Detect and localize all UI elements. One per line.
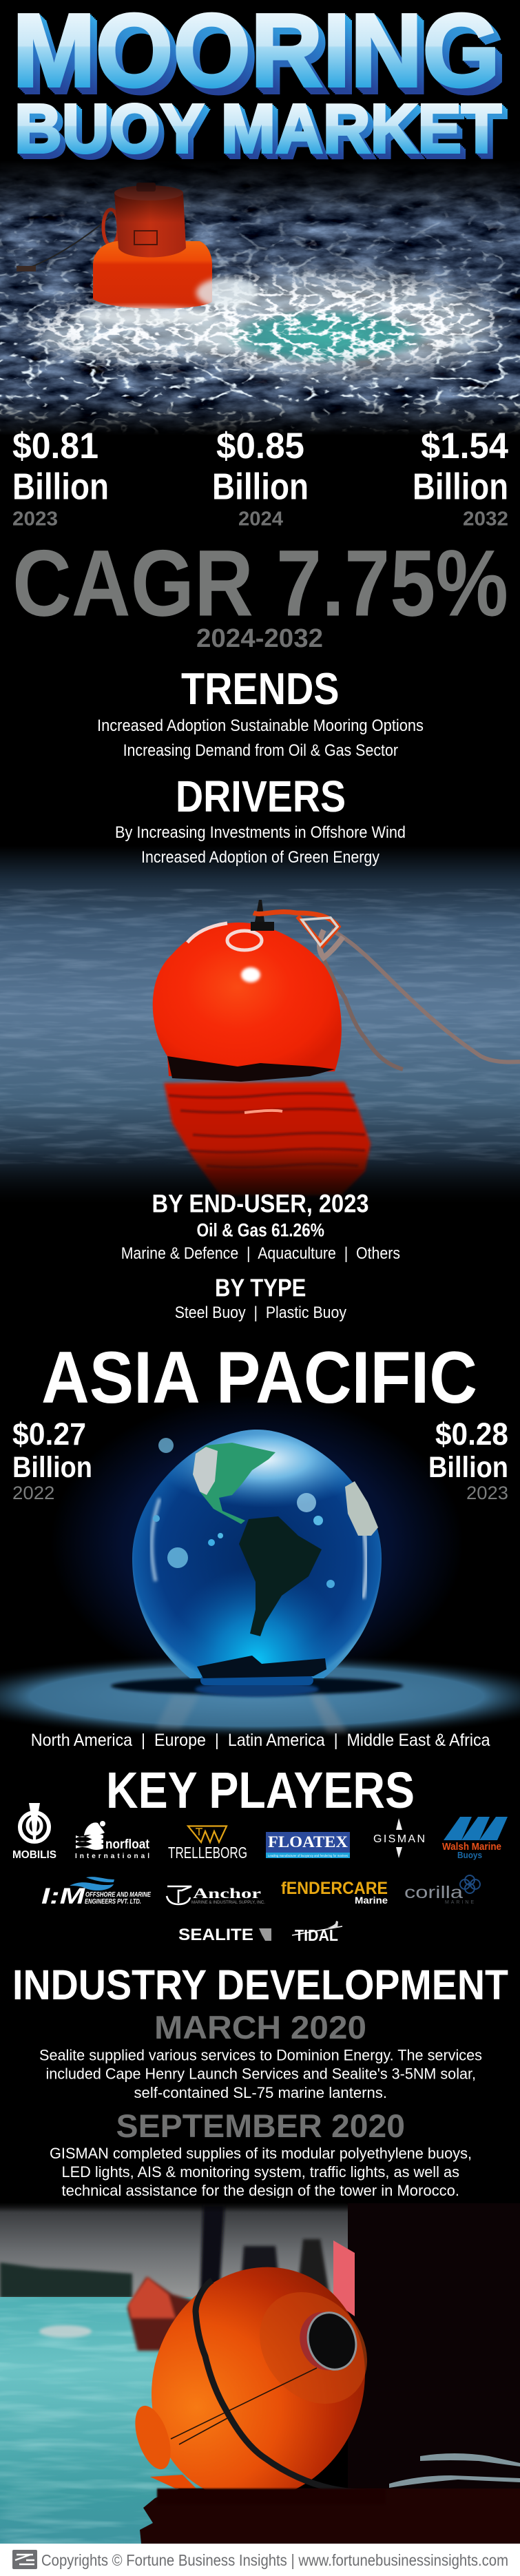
regional stat: 2022: $0.27	[12, 1416, 86, 1452]
logo: IRM Offshore: I:M	[41, 1884, 86, 1908]
asia pacific heading: ASIA PACIFIC	[41, 1336, 477, 1419]
development: March 2020	[39, 2009, 482, 2101]
trends: TRENDS	[181, 663, 339, 714]
market size stats: 2032	[463, 508, 508, 530]
logo: Gisman	[373, 1818, 425, 1858]
logo: Fendercare: fENDERCARE	[281, 1879, 388, 1898]
distant boat	[127, 2277, 196, 2351]
globe sphere	[132, 1430, 382, 1685]
trends: Increasing Demand from Oil & Gas Sector	[123, 741, 398, 760]
drivers	[115, 772, 406, 867]
development: March 2020: MARCH 2020	[154, 2009, 366, 2046]
buoy ball	[117, 2235, 399, 2533]
development: March 2020: included Cape Henry Launch Services and Sealite's 3-5NM solar,	[45, 2065, 476, 2082]
by end-user: BY END-USER, 2023	[152, 1189, 369, 1218]
mooring line	[21, 214, 114, 271]
market size stats	[12, 426, 508, 530]
ropes	[331, 930, 520, 1062]
logo: IRM Offshore: OFFSHORE AND MARINE	[85, 1891, 151, 1899]
logo: Norfloat	[75, 1821, 150, 1860]
logo: Mobilis	[12, 1803, 56, 1861]
logo: Tidal: TIDAL	[295, 1926, 338, 1944]
north america	[193, 1443, 275, 1524]
logo: Corilla: MARINE	[445, 1900, 474, 1905]
buoy fitting	[292, 2305, 358, 2377]
market size stats: $0.85	[216, 426, 304, 466]
development: September 2020: LED lights, AIS & monitoring system, traffic lights, as well as	[62, 2163, 459, 2181]
bubbles	[158, 1438, 174, 1453]
logo: IRM Offshore	[41, 1877, 151, 1908]
dark hull	[341, 2201, 520, 2544]
logo: Gisman: GISMAN	[373, 1833, 425, 1845]
logo: Corilla: corilla	[404, 1883, 463, 1902]
market size stats: $1.54	[421, 426, 508, 466]
logo: Trelleborg: TRELLEBORG	[168, 1844, 247, 1862]
reflection	[0, 1082, 520, 1206]
market size stats: $0.81	[12, 426, 98, 466]
buoy body	[93, 183, 212, 309]
development: September 2020: GISMAN completed supplies of its modular polyethylene buoys,	[50, 2145, 472, 2162]
by type: BY TYPE	[215, 1273, 306, 1302]
water surface below buoy	[157, 2489, 386, 2504]
development: March 2020: Sealite supplied various services to Dominion Energy. The services	[39, 2046, 482, 2064]
key players heading: KEY PLAYERS	[106, 1762, 415, 1819]
logo: Walsh Marine Buoys: Walsh Marine	[442, 1842, 501, 1853]
drivers: DRIVERS	[176, 772, 346, 821]
drivers: By Increasing Investments in Offshore Wind	[115, 823, 406, 842]
logo: Norfloat: International	[75, 1853, 149, 1860]
regional stat: 2023: 2023	[466, 1483, 508, 1503]
by type: Steel Buoy | Plastic Buoy	[175, 1304, 347, 1322]
market size stats: Billion	[12, 466, 109, 507]
logo: Fendercare: Marine	[355, 1895, 388, 1906]
by end-user: Oil & Gas 61.26%	[197, 1219, 324, 1240]
regional stat: 2022: 2022	[12, 1483, 54, 1503]
development: September 2020	[50, 2108, 472, 2199]
buoy rope	[196, 2280, 382, 2493]
title	[12, 0, 501, 167]
logo: Fendercare	[281, 1879, 388, 1906]
title: BUOY MARKET	[14, 90, 501, 167]
logo: IRM Offshore: ENGINEERS PVT. LTD.	[85, 1898, 141, 1906]
logo: Sealite: SEALITE	[178, 1926, 253, 1944]
photo: red mooring buoy on calm water	[0, 846, 520, 1206]
market size stats: 2024	[238, 508, 283, 530]
photo: orange buoy beside vessel	[0, 2198, 520, 2544]
footer	[0, 2544, 520, 2576]
regional stat: 2023: $0.28	[435, 1416, 508, 1452]
by type	[175, 1273, 347, 1322]
logo: Floatex	[266, 1832, 350, 1858]
logo: Corilla	[404, 1875, 480, 1905]
market size stats: Billion	[212, 466, 309, 507]
development: September 2020: SEPTEMBER 2020	[116, 2108, 405, 2144]
logo: Floatex: Leading manufacturer of buoyancy and fendering for marines	[268, 1854, 349, 1857]
CAGR period: 2024-2032	[196, 624, 323, 653]
floor glow	[0, 1653, 520, 1739]
globe illustration	[0, 1395, 520, 1753]
logo: Trelleborg	[168, 1826, 247, 1862]
by end-user	[121, 1189, 400, 1263]
rope knot and handle	[251, 900, 338, 945]
logo: Anchor	[167, 1885, 265, 1905]
regions list: North America | Europe | Latin America | Middle East & Africa	[31, 1731, 490, 1750]
title: BUOY MARKET	[14, 90, 501, 167]
dark water reflection	[140, 2489, 520, 2544]
regional stat: 2023	[428, 1416, 508, 1503]
footer logo	[12, 2550, 37, 2569]
logo: Anchor: MARINE & INDUSTRIAL SUPPLY, INC.	[191, 1901, 265, 1905]
south america	[239, 1516, 322, 1636]
logo: Norfloat: norfloat	[105, 1837, 150, 1852]
regional stat: 2022	[12, 1416, 92, 1503]
bottom land	[197, 1656, 326, 1678]
trends: Increased Adoption Sustainable Mooring Options	[97, 717, 424, 735]
logo: Walsh Marine Buoys: Buoys	[457, 1850, 482, 1860]
logo: Anchor: Anchor	[193, 1885, 261, 1902]
regional stat: 2022: Billion	[12, 1451, 92, 1484]
logo: Walsh Marine Buoys	[442, 1817, 508, 1860]
by end-user: Marine & Defence | Aquaculture | Others	[121, 1244, 400, 1263]
africa edge	[345, 1481, 378, 1536]
buoy ball	[153, 923, 342, 1082]
photo: buoy in rough sea	[0, 161, 520, 444]
masts	[200, 2205, 225, 2301]
drivers: Increased Adoption of Green Energy	[141, 848, 379, 867]
logo: Floatex: FLOATEX	[268, 1833, 348, 1851]
development: September 2020: technical assistance for the design of the tower in Morocco.	[62, 2182, 459, 2199]
logo: Mobilis: MOBILIS	[12, 1849, 56, 1861]
trends	[97, 663, 424, 760]
regional stat: 2023: Billion	[428, 1451, 508, 1484]
development: March 2020: self-contained SL-75 marine lanterns.	[134, 2084, 387, 2101]
market size stats: 2023	[12, 508, 58, 530]
